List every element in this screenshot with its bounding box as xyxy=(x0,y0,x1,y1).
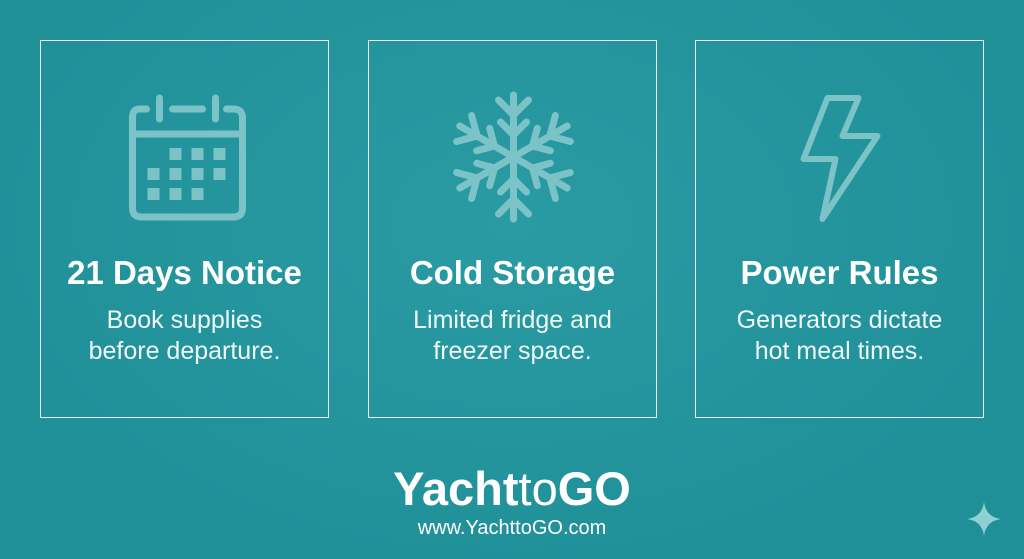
text: freezer space. xyxy=(433,337,592,365)
logo: YachttoGO xyxy=(393,462,631,515)
heading: Power Rules xyxy=(740,254,939,291)
text: before departure. xyxy=(89,337,280,365)
text: Generators dictate xyxy=(737,306,942,334)
heading: Cold Storage xyxy=(410,254,615,291)
website url: www.YachttoGO.com xyxy=(418,517,606,539)
text xyxy=(737,306,942,365)
text: hot meal times. xyxy=(755,337,924,365)
text: Book supplies xyxy=(107,306,262,334)
text xyxy=(413,306,612,365)
icon: sparkle xyxy=(967,502,1001,536)
icon: lightning bolt xyxy=(800,95,880,222)
icon: calendar xyxy=(129,94,246,220)
text xyxy=(89,306,280,365)
panel: power rules xyxy=(695,40,984,418)
heading: 21 Days Notice xyxy=(67,254,302,291)
panel: 21 days notice xyxy=(40,40,329,418)
panel: cold storage xyxy=(368,40,657,418)
icon: snowflake xyxy=(453,92,574,222)
text: Limited fridge and xyxy=(413,306,612,334)
